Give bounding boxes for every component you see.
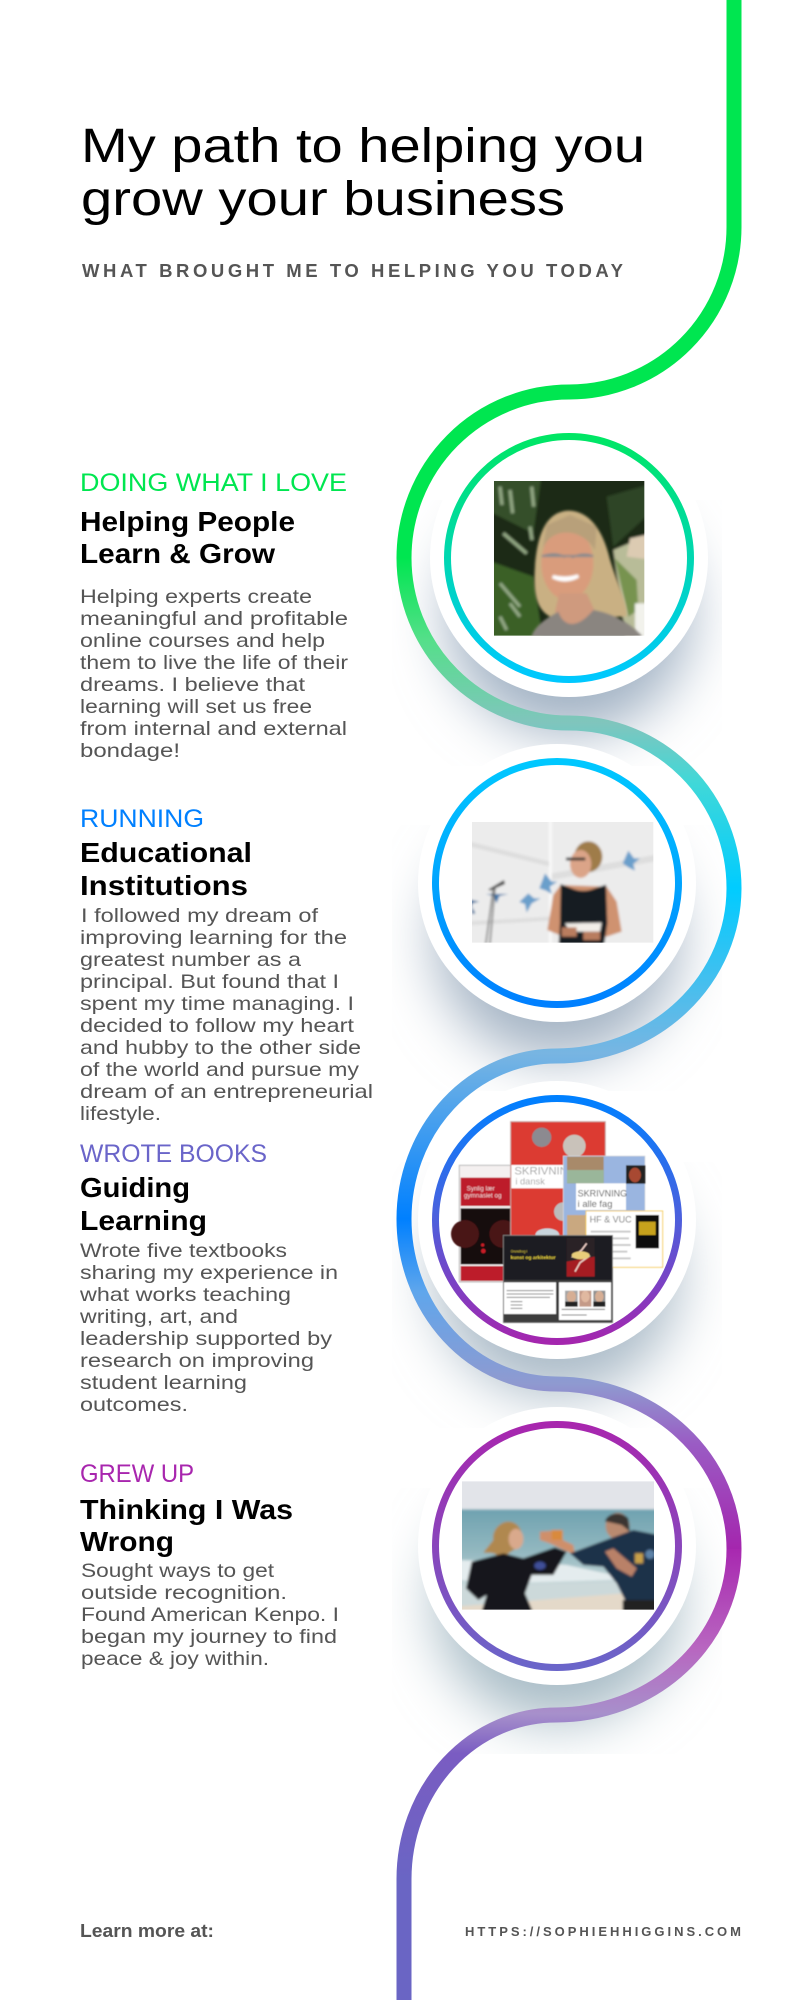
heading: Thinking I Was <box>80 1494 293 1525</box>
panel: wrote books <box>79 1140 338 1416</box>
book: Grundbog i kunst og arkitektur: Grundbog i <box>511 1250 527 1254</box>
body text: leadership supported by <box>80 1328 332 1350</box>
book: left cover: gymnasiet og <box>464 1192 502 1199</box>
heading: Educational <box>80 837 252 868</box>
photo: book covers <box>451 1122 663 1323</box>
circle drop shadows <box>435 491 691 1723</box>
body text: greatest number as a <box>80 949 301 971</box>
body text: lifestyle. <box>80 1103 161 1125</box>
body text: began my journey to find <box>81 1626 337 1648</box>
body text: what works teaching <box>79 1284 291 1306</box>
heading: Guiding <box>80 1172 190 1203</box>
body text <box>80 586 349 762</box>
body text: spent my time managing. I <box>80 993 354 1015</box>
photo: kenpo on the beach <box>462 1482 654 1610</box>
book: HF & VUC: HF & VUC <box>590 1214 632 1224</box>
body text: and hubby to the other side <box>80 1037 361 1059</box>
heading: Learn & Grow <box>80 538 275 569</box>
circle 3: books <box>418 1081 696 1359</box>
panel: running <box>80 805 373 1125</box>
body text: online courses and help <box>80 630 325 652</box>
circle 1: portrait <box>430 419 708 697</box>
body text: Sought ways to get <box>81 1560 275 1582</box>
body text: from internal and external <box>80 718 347 740</box>
body text: learning will set us free <box>80 696 312 718</box>
label: GREW UP <box>80 1460 194 1488</box>
book: left cover <box>451 1165 517 1282</box>
book: HF & VUC <box>586 1211 663 1267</box>
body text: Wrote five textbooks <box>80 1240 287 1262</box>
heading: Helping People <box>80 506 295 537</box>
body text <box>79 1240 338 1416</box>
body text: research on improving <box>80 1350 314 1372</box>
heading <box>80 1172 207 1236</box>
book: Skrivning i dansk: SKRIVNING <box>514 1166 577 1178</box>
heading: Wrong <box>80 1526 174 1557</box>
subtitle: WHAT BROUGHT ME TO HELPING YOU TODAY <box>82 260 624 281</box>
body text: meaningful and profitable <box>80 608 348 630</box>
title <box>81 120 645 226</box>
body text: of the world and pursue my <box>80 1059 359 1081</box>
body text: dreams. I believe that <box>80 674 306 696</box>
label: RUNNING <box>80 805 204 833</box>
book: Skrivning i dansk: i dansk <box>515 1176 545 1186</box>
body text: peace & joy within. <box>81 1648 269 1670</box>
book: Skrivning i dansk <box>511 1122 605 1242</box>
body text: bondage! <box>80 740 180 762</box>
heading <box>80 506 295 569</box>
panel: grew up <box>80 1460 339 1670</box>
body text: principal. But found that I <box>80 971 339 993</box>
body text: I followed my dream of <box>81 905 319 927</box>
photo: portrait <box>494 481 644 636</box>
footer: learn more: Learn more at: <box>80 1921 214 1941</box>
body text <box>80 905 373 1125</box>
heading: Learning <box>80 1205 207 1236</box>
circle 2: speaking on stage <box>418 744 696 1022</box>
body text: Helping experts create <box>80 586 312 608</box>
book: Skrivning i alle fag: SKRIVNING <box>578 1189 627 1199</box>
body text: writing, art, and <box>79 1306 238 1328</box>
book: Grundbog i kunst og arkitektur: kunst og arkitektur <box>511 1255 556 1261</box>
title: grow your business <box>81 173 565 226</box>
book: Skrivning i alle fag: i alle fag <box>578 1199 612 1209</box>
heading: Institutions <box>80 870 248 901</box>
photo: speaker <box>472 822 654 943</box>
heading <box>80 1494 293 1557</box>
body text: decided to follow my heart <box>80 1015 355 1037</box>
body text <box>81 1560 339 1670</box>
body text: outcomes. <box>80 1394 188 1416</box>
body text: dream of an entrepreneurial <box>80 1081 373 1103</box>
body text: outside recognition. <box>81 1582 287 1604</box>
footer: website url: HTTPS://SOPHIEHHIGGINS.COM <box>465 1924 741 1939</box>
book: left cover: Synlig lær <box>467 1186 495 1193</box>
body text: improving learning for the <box>80 927 347 949</box>
heading <box>80 837 252 901</box>
panel: doing what I love <box>80 469 349 762</box>
label: WROTE BOOKS <box>80 1140 267 1168</box>
body text: student learning <box>80 1372 247 1394</box>
body text: sharing my experience in <box>80 1262 338 1284</box>
book: Grundbog i kunst og arkitektur <box>503 1235 613 1323</box>
book: Skrivning i alle fag <box>563 1156 645 1237</box>
body text: them to live the life of their <box>80 652 349 674</box>
winding path line <box>404 0 734 2000</box>
circle 4: kenpo <box>418 1407 696 1685</box>
body text: Found American Kenpo. I <box>81 1604 339 1626</box>
title: My path to helping you <box>81 120 645 173</box>
label: DOING WHAT I LOVE <box>80 469 347 497</box>
